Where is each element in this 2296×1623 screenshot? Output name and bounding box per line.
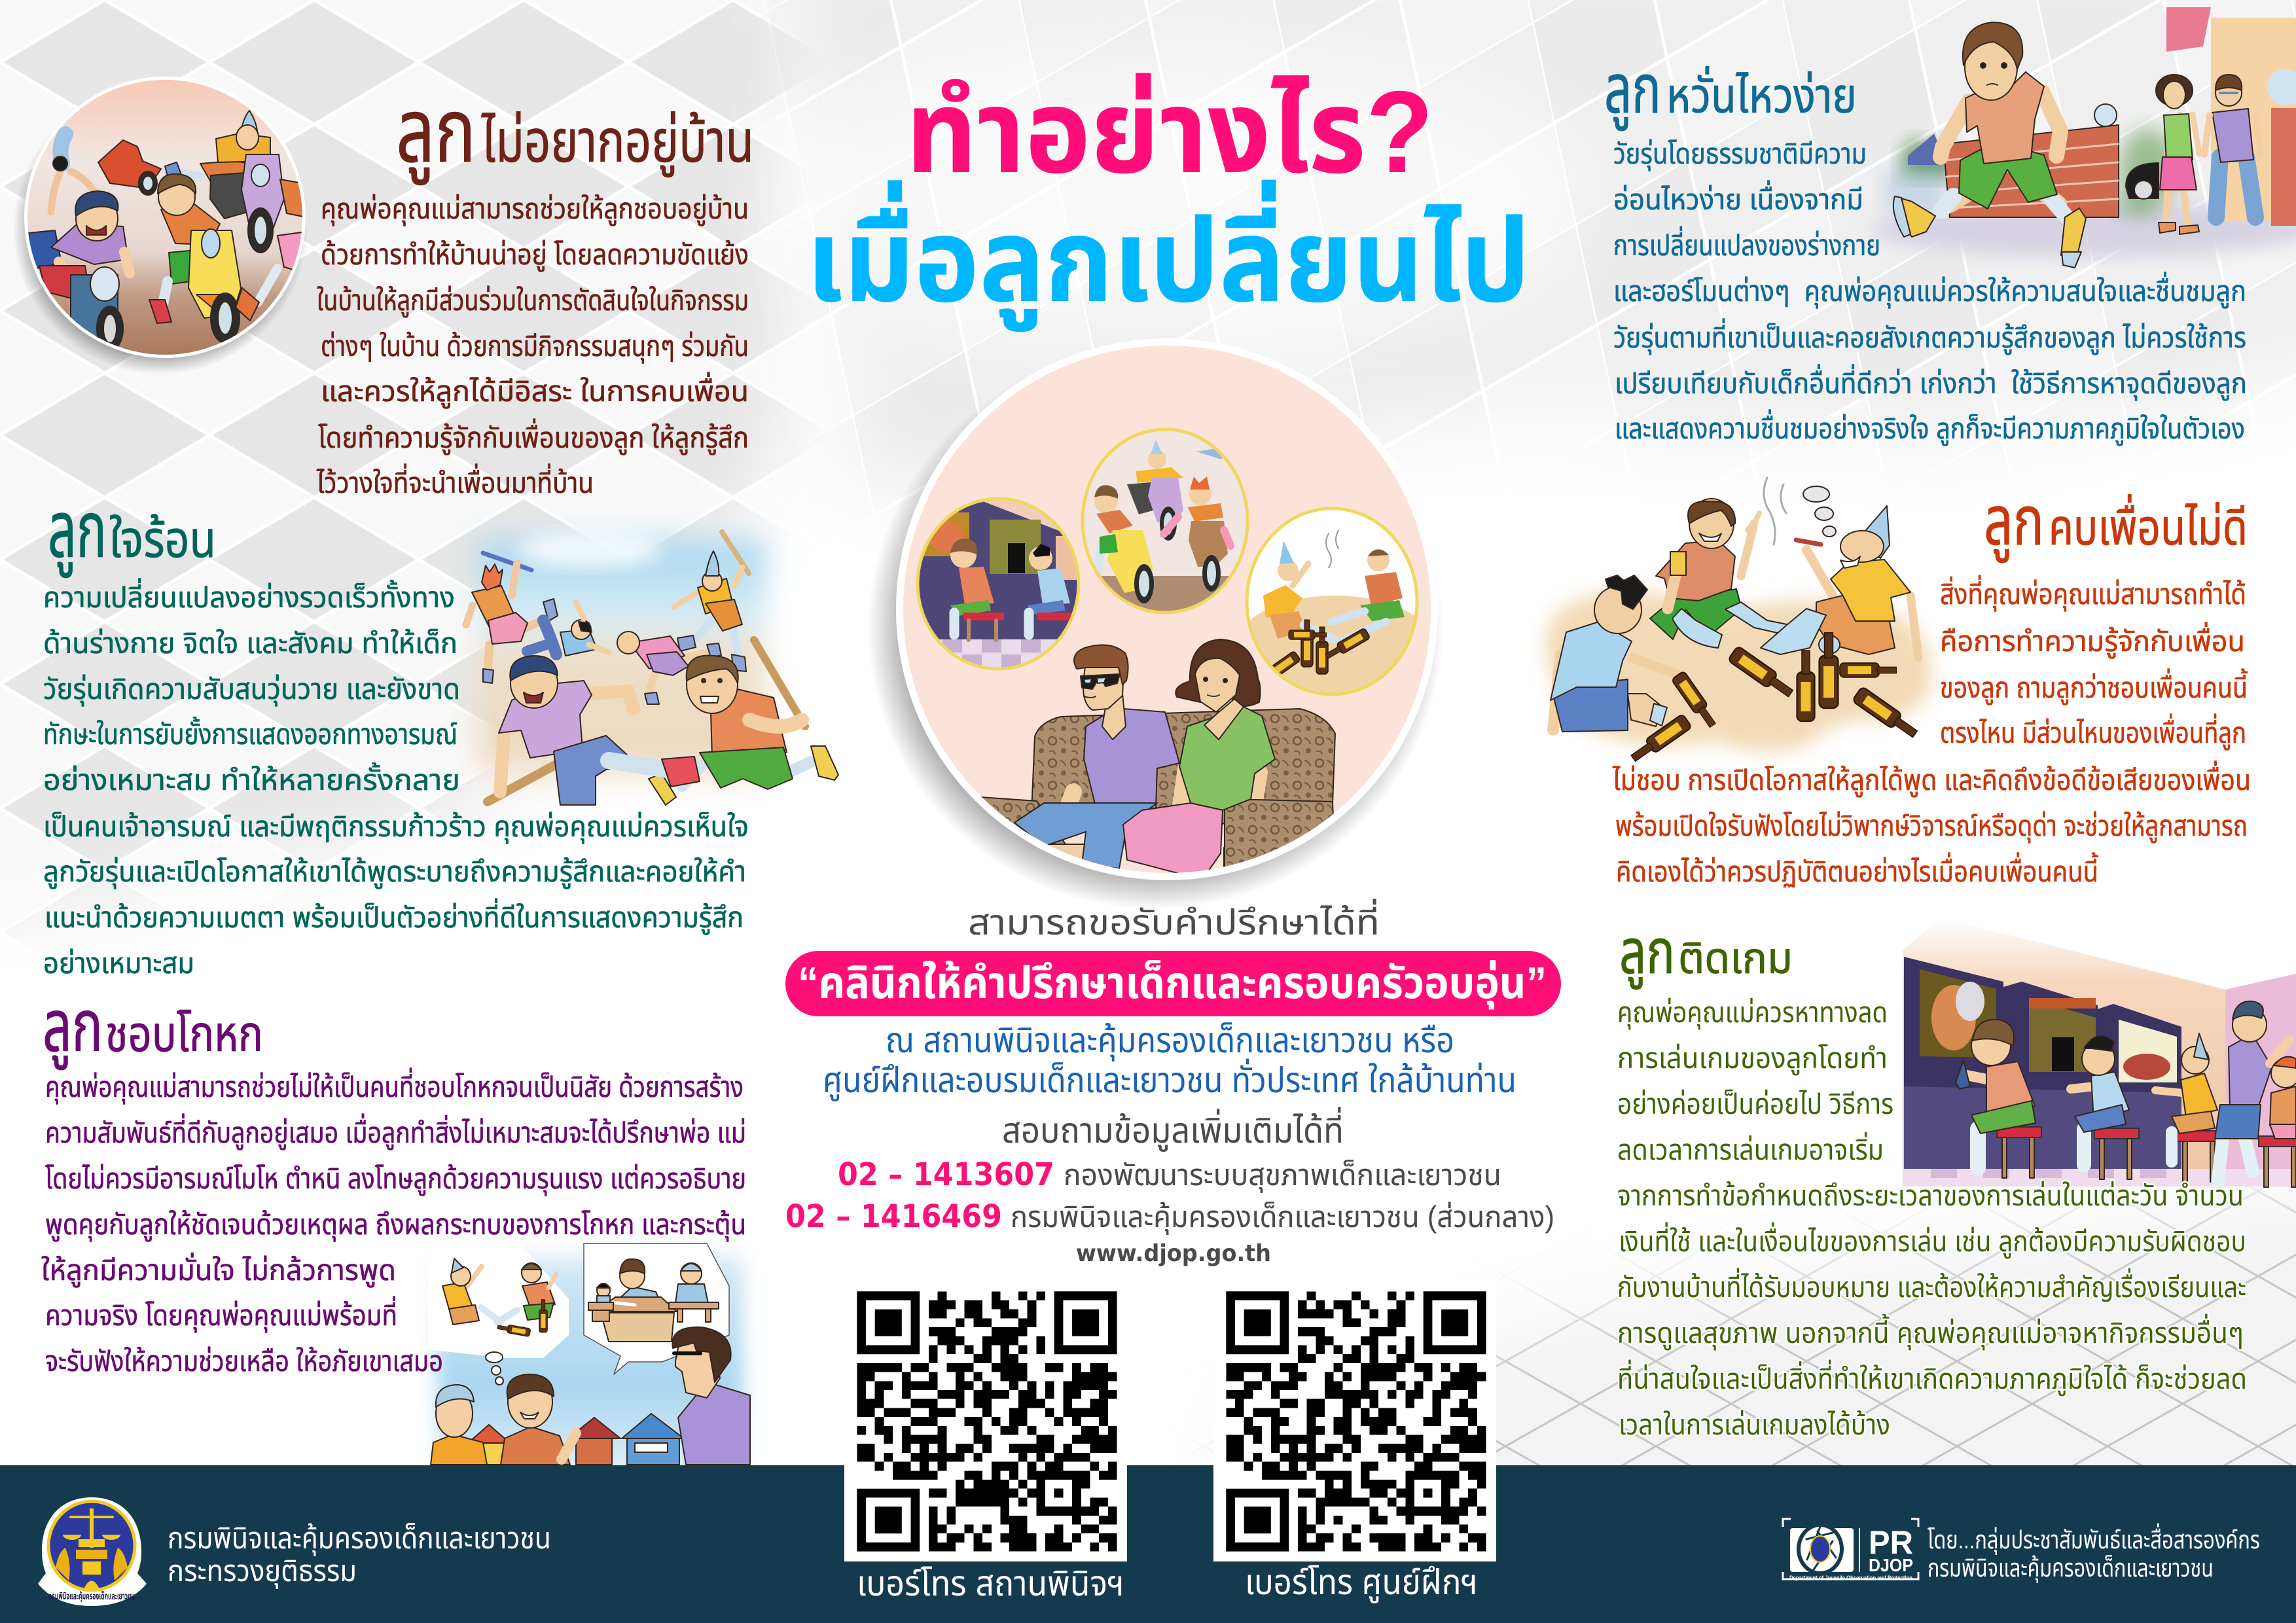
text block: อย่างค่อยเป็นค่อยไป วิธีการ: [1617, 1088, 1893, 1120]
footer: department name: [168, 1521, 551, 1589]
footer: credit: กรมพินิจและคุ้มครองเด็กและเยาวชน: [1928, 1555, 2214, 1583]
text block: จะรับฟังให้ความช่วยเหลือ ให้อภัยเขาเสมอ: [45, 1346, 443, 1378]
footer: credit: [1928, 1523, 2260, 1583]
QR captions: เบอร์โทร สถานพินิจฯ: [857, 1564, 1124, 1603]
text block: แนะนำด้วยความเมตตา พร้อมเป็นตัวอย่างที่ดีในการแสดงความรู้สึก: [45, 898, 744, 935]
text block: การเปลี่ยนแปลงของร่างกาย: [1613, 226, 1880, 262]
heading: ลูก: [1984, 483, 2044, 563]
heading: คบเพื่อนไม่ดี: [2049, 494, 2248, 556]
phone numbers: 02 – 1413607: [838, 1156, 1054, 1193]
text block: เวลาในการเล่นเกมลงได้บ้าง: [1619, 1409, 1890, 1441]
title: [806, 67, 1530, 332]
title: ทำอย่างไร?: [906, 67, 1433, 197]
clinic pill: “คลินิกให้คำปรึกษาเด็กและครอบครัวอบอุ่น”: [798, 958, 1547, 1010]
text block: คิดเองได้ว่าควรปฏิบัติตนอย่างไรเมื่อคบเพื่อนคนนี้: [1616, 852, 2098, 888]
text block: ไว้วางใจที่จะนำเพื่อนมาที่บ้าน: [316, 463, 594, 499]
heading: [1984, 483, 2248, 563]
illustration: boy jumping wall: [1872, 7, 2296, 268]
couple on sofa: [980, 639, 1336, 880]
text block: [1613, 138, 2247, 446]
heading: ลูก: [48, 486, 107, 578]
central circle illustration: [867, 338, 1443, 910]
heading: ลูก: [1619, 918, 1675, 990]
panel: stays away from home: [13, 77, 754, 499]
website: www.djop.go.th: [1076, 1240, 1271, 1267]
heading: [1619, 918, 1793, 990]
phone numbers: [785, 1156, 1554, 1235]
heading: ชอบโกหก: [105, 1007, 263, 1062]
text block: คือการทำความรู้จักกับเพื่อน: [1940, 622, 2245, 659]
text block: คุณพ่อคุณแม่ควรหาทางลด: [1617, 997, 1888, 1030]
illustration: drinking boys: [1545, 478, 1932, 765]
panel: hot-tempered: [43, 486, 838, 980]
text block: วัยรุ่นเกิดความสับสนวุ่นวาย และยังขาด: [43, 673, 460, 707]
heading: ติดเกม: [1678, 934, 1793, 982]
panel: game addiction: [1617, 918, 2296, 1441]
text block: สิ่งที่คุณพ่อคุณแม่สามารถทำได้: [1940, 575, 2246, 612]
footer: left logo: [38, 1497, 147, 1606]
footer: PR logo: [1783, 1519, 1918, 1581]
text block: ทักษะในการยับยั้งการแสดงออกทางอารมณ์: [43, 717, 457, 751]
text block: ความจริง โดยคุณพ่อคุณแม่พร้อมที่: [45, 1296, 397, 1333]
text block: และฮอร์โมนต่างๆ คุณพ่อคุณแม่ควรให้ความสนใจและชื่นชมลูก: [1613, 272, 2246, 309]
panel: likes to lie: [41, 986, 750, 1482]
text block: และควรให้ลูกได้มีอิสระ ในการคบเพื่อน: [321, 372, 749, 409]
footer band: [0, 1465, 2296, 1623]
QR captions: [857, 1563, 1478, 1603]
illustration: fight: [466, 531, 838, 805]
text block: ด้วยการทำให้บ้านน่าอยู่ โดยลดความขัดแย้ง: [321, 239, 749, 272]
locations: ณ สถานพินิจและคุ้มครองเด็กและเยาวชน หรือ: [886, 1021, 1454, 1061]
text block: ต่างๆ ในบ้าน ด้วยการมีกิจกรรมสนุกๆ ร่วมกัน: [321, 330, 749, 364]
text block: พูดคุยกับลูกให้ชัดเจนด้วยเหตุผล ถึงผลกระทบของการโกหก และกระตุ้น: [45, 1209, 746, 1242]
footer: PR logo: DJOP: [1869, 1555, 1913, 1575]
heading: ไม่อยากอยู่บ้าน: [480, 109, 754, 177]
text block: ของลูก ถามลูกว่าชอบเพื่อนคนนี้: [1940, 668, 2248, 705]
heading: ใจร้อน: [109, 510, 216, 568]
text block: ในบ้านให้ลูกมีส่วนร่วมในการตัดสินใจในกิจกรรม: [317, 285, 749, 318]
consult heading: สามารถขอรับคำปรึกษาได้ที่: [968, 899, 1380, 942]
text block: ลูกวัยรุ่นและเปิดโอกาสให้เขาได้พูดระบายถึงความรู้สึกและคอยให้คำ: [43, 856, 746, 889]
phone numbers: กองพัฒนาระบบสุขภาพเด็กและเยาวชน: [1064, 1158, 1501, 1193]
phone numbers: 02 – 1416469: [785, 1198, 1002, 1235]
panel: consultation info: [785, 338, 1561, 1267]
text block: ลดเวลาการเล่นเกมอาจเริ่ม: [1617, 1132, 1884, 1166]
mini scene: drinking: [1237, 507, 1433, 697]
text block: โดยทำความรู้จักกับเพื่อนของลูก ให้ลูกรู้สึก: [318, 418, 749, 455]
text block: เป็นคนเจ้าอารมณ์ และมีพฤติกรรมก้าวร้าว คุณพ่อคุณแม่ควรเห็นใจ: [43, 811, 749, 844]
footer: left logo: กรมพินิจและคุ้มครองเด็กและเยาวชน: [48, 1590, 135, 1602]
phone numbers: กรมพินิจและคุ้มครองเด็กและเยาวชน (ส่วนกลาง): [1011, 1200, 1554, 1235]
panel: QR code 1: [844, 1279, 1127, 1561]
QR captions: เบอร์โทร ศูนย์ฝึกฯ: [1245, 1563, 1478, 1603]
footer: department name: กระทรวงยุติธรรม: [168, 1554, 357, 1589]
panel: easily upset: [1604, 7, 2296, 446]
text block: ที่น่าสนใจและเป็นสิ่งที่ทำให้เขาเกิดความภาคภูมิใจได้ ก็จะช่วยลด: [1617, 1359, 2247, 1397]
heading: [1604, 51, 1857, 131]
text block: ด้านร่างกาย จิตใจ และสังคม ทำให้เด็ก: [43, 628, 457, 660]
heading: [48, 486, 216, 578]
enquiry heading: สอบถามข้อมูลเพิ่มเติมได้ที่: [1002, 1107, 1344, 1152]
panel: bad friends: [1545, 478, 2251, 888]
text block: [1612, 575, 2251, 888]
text block: [1617, 997, 2247, 1441]
text block: ให้ลูกมีความมั่นใจ ไม่กล้วการพูด: [41, 1253, 396, 1288]
illustration: speech bubbles: [428, 1240, 750, 1482]
illustration: game arcade: [1903, 918, 2296, 1187]
text block: วัยรุ่นโดยธรรมชาติมีความ: [1613, 138, 1867, 171]
text block: ความเปลี่ยนแปลงอย่างรวดเร็วทั้งทาง: [43, 578, 455, 614]
footer: PR logo: Department of Juvenile Observation and Protection: [1789, 1575, 1912, 1581]
heading: [43, 986, 263, 1070]
text block: คุณพ่อคุณแม่สามารถช่วยให้ลูกชอบอยู่บ้าน: [321, 193, 749, 226]
text block: โดยไม่ควรมีอารมณ์โมโห ตำหนิ ลงโทษลูกด้วยความรุนแรง แต่ควรอธิบาย: [45, 1163, 746, 1196]
text block: อย่างเหมาะสม: [43, 948, 194, 980]
text block: [41, 1067, 746, 1378]
title: เมื่อลูกเปลี่ยนไป: [806, 179, 1530, 332]
mini scene: bikes: [1081, 428, 1249, 615]
illustration: motorbike gang circle: [13, 77, 308, 374]
heading: ลูก: [396, 81, 476, 185]
panel: QR code 2: [1213, 1279, 1496, 1561]
text block: การดูแลสุขภาพ นอกจากนี้ คุณพ่อคุณแม่อาจหากิจกรรมอื่นๆ: [1617, 1313, 2244, 1351]
heading: ลูก: [1604, 51, 1661, 131]
heading: หวั่นไหวง่าย: [1666, 66, 1857, 123]
heading: [396, 81, 754, 185]
text block: ความสัมพันธ์ที่ดีกับลูกอยู่เสมอ เมื่อลูกทำสิ่งไม่เหมาะสมจะได้ปรึกษาพ่อ แม่: [45, 1113, 746, 1150]
text block: การเล่นเกมของลูกโดยทำ: [1617, 1043, 1888, 1076]
footer: department name: กรมพินิจและคุ้มครองเด็กและเยาวชน: [168, 1521, 551, 1556]
text block: อย่างเหมาะสม ทำให้หลายครั้งกลาย: [43, 762, 460, 796]
text block: อ่อนไหวง่าย เนื่องจากมี: [1613, 180, 1863, 216]
text block: [43, 578, 749, 980]
footer: PR logo: PR: [1869, 1524, 1913, 1561]
text block: เปรียบเทียบกับเด็กอื่นที่ดีกว่า เก่งกว่า ใช้วิธีการหาจุดดีของลูก: [1615, 364, 2247, 401]
text block: คุณพ่อคุณแม่สามารถช่วยไม่ให้เป็นคนที่ชอบโกหกจนเป็นนิสัย ด้วยการสร้าง: [45, 1067, 744, 1105]
heading: ลูก: [43, 986, 103, 1070]
locations: ศูนย์ฝึกและอบรมเด็กและเยาวชน ทั่วประเทศ ใกล้บ้านท่าน: [823, 1058, 1516, 1101]
text block: [316, 193, 749, 499]
locations: [823, 1021, 1516, 1101]
mini scene: games: [916, 497, 1081, 672]
